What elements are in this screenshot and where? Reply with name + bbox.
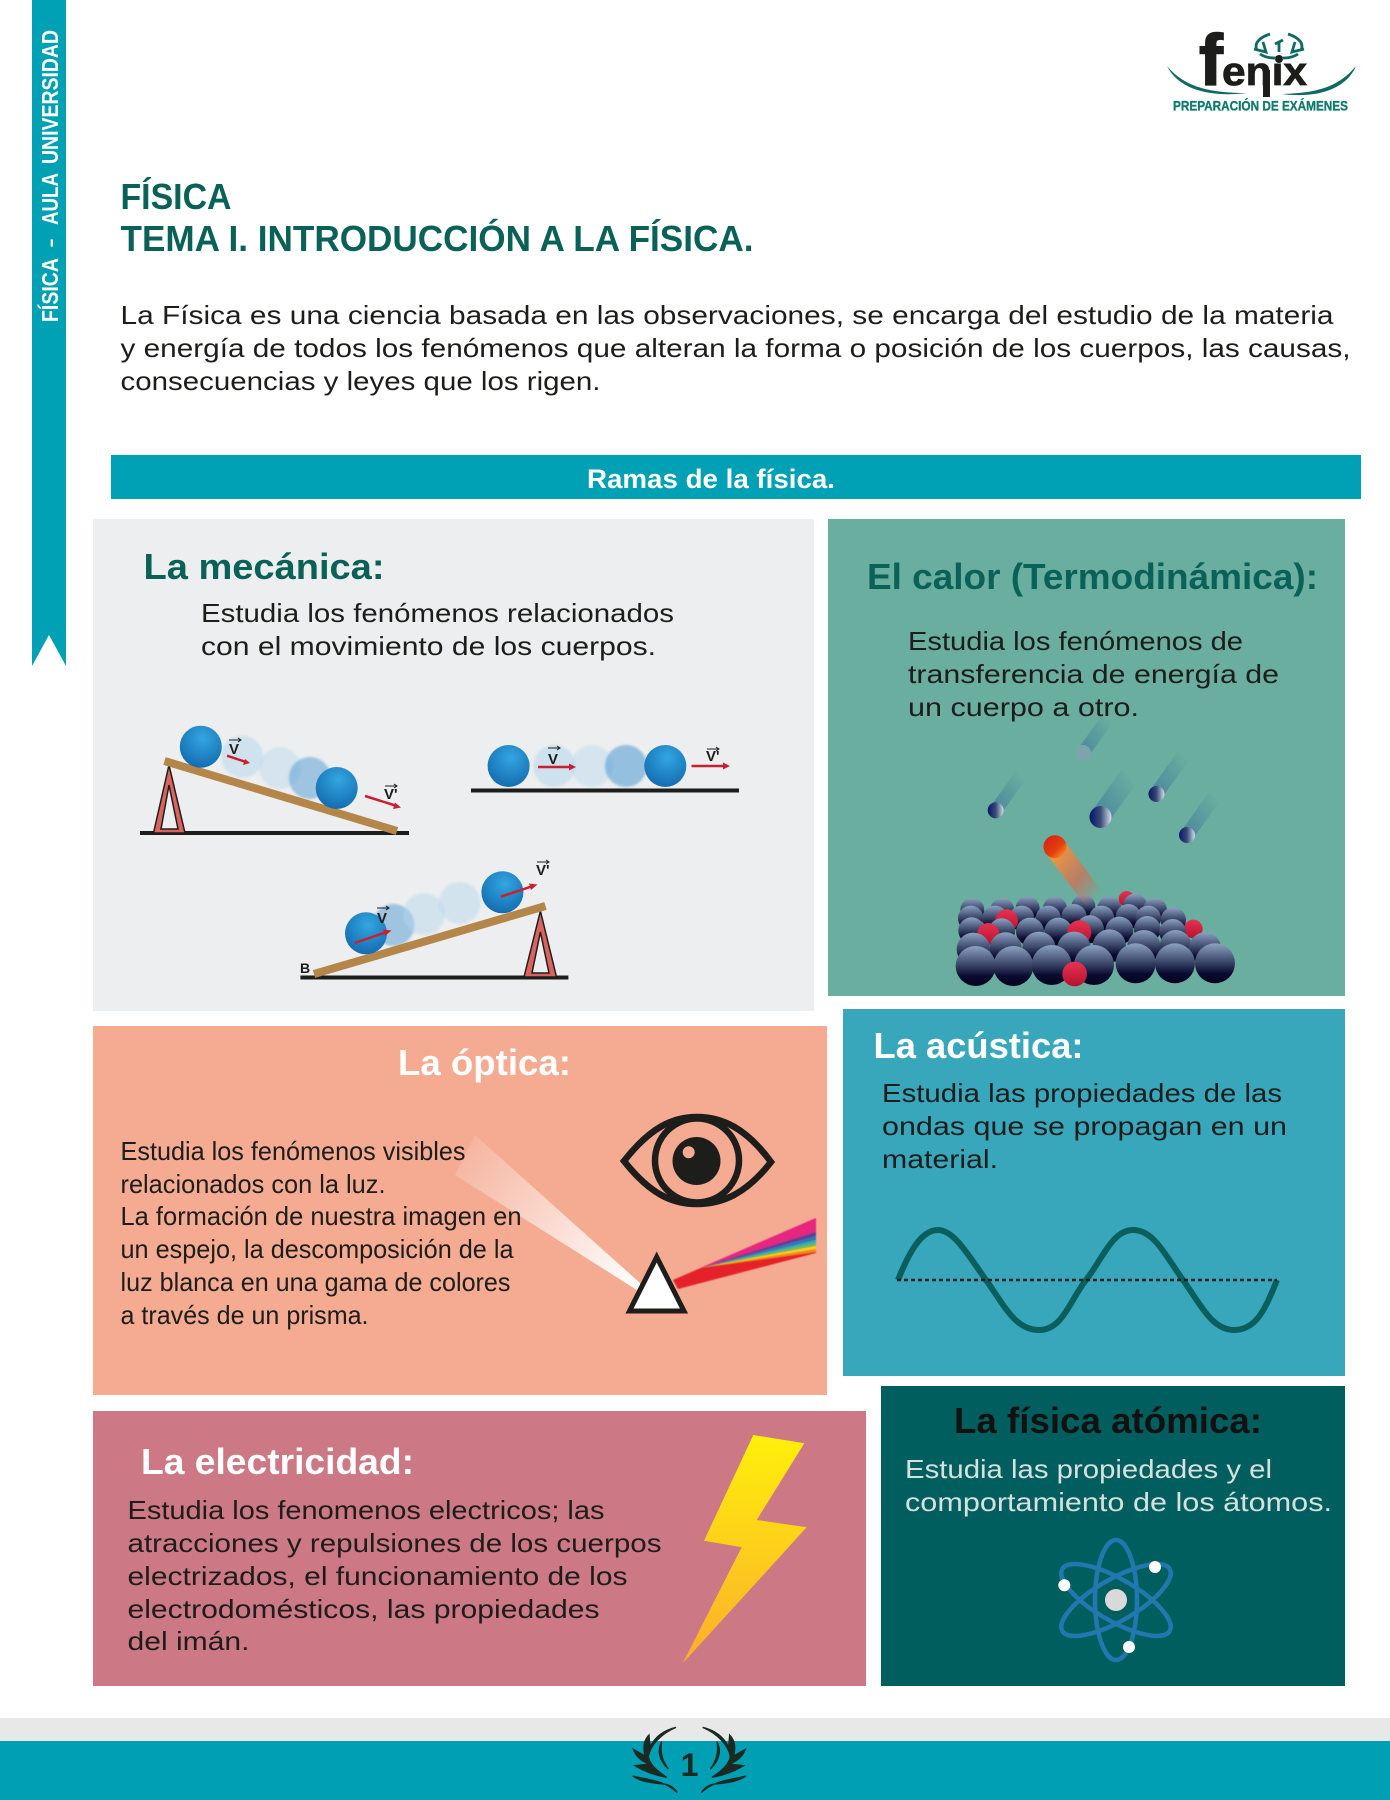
illustration: hot particle [1044,835,1095,900]
diagram: ball rolling down ramp: V [229,741,239,758]
text: electricidad description: Estudia los fenomenos electricos; las [128,1495,604,1525]
text: óptica description: un espejo, la descomposición de la [120,1234,514,1264]
side ribbon [32,0,66,666]
heading: la óptica: La óptica: [398,1042,571,1083]
icon: prism [630,1257,684,1311]
text: electricidad description: electrodomésticos, las propiedades [128,1594,600,1624]
text: óptica description: La formación de nuestra imagen en [120,1201,522,1231]
panel: la física atómica [881,1386,1345,1686]
text: mecánica description: con el movimiento de los cuerpos. [201,631,656,661]
chart: sound wave [897,1230,1277,1330]
text: óptica description [120,1136,522,1330]
text: electricidad description: del imán. [128,1626,250,1656]
intro paragraph: consecuencias y leyes que los rigen. [120,366,600,396]
heading: la acústica: La acústica: [874,1025,1084,1066]
intro paragraph: y energía de todos los fenómenos que alteran la forma o posición de los cuerpos, las causas, [120,333,1350,363]
text: óptica description: a través de un prisma. [120,1300,368,1330]
diagram: ball rolling up ramp [300,860,568,980]
heading: la mecánica: La mecánica: [144,546,384,587]
text: calor description: transferencia de energía de [908,659,1279,689]
title [120,176,754,259]
ribbon label: AULA [37,173,63,225]
panel: el calor [828,519,1345,996]
text: atómica description [905,1454,1332,1517]
diagram: ball rolling on flat surface [471,745,739,792]
text: óptica description: relacionados con la luz. [120,1169,386,1199]
diagram: ball rolling down ramp [140,726,409,835]
illustration: atoms lattice [956,891,1235,986]
text: óptica description: luz blanca en una gama de colores [120,1267,510,1297]
text: electricidad description: atracciones y repulsiones de los cuerpos [128,1528,662,1558]
text: acústica description: material. [882,1144,998,1174]
icon: lightning bolt [683,1435,807,1663]
heading: la física atómica: La física atómica: [954,1400,1262,1441]
text: electricidad description: electrizados, el funcionamiento de los [128,1561,628,1591]
text: atómica description: Estudia las propiedades y el [905,1454,1272,1484]
spectrum rays [673,1218,816,1289]
text: acústica description: ondas que se propagan en un [882,1111,1287,1141]
ribbon label: UNIVERSIDAD [37,30,63,164]
text: acústica description: Estudia las propiedades de las [882,1078,1282,1108]
section bar: Ramas de la física: Ramas de la física. [587,464,835,494]
heading: la electricidad: La electricidad: [141,1441,414,1482]
diagram: ball rolling down ramp: V' [384,786,398,803]
text: electricidad description [128,1495,662,1656]
intro paragraph [120,300,1350,396]
text: óptica description: Estudia los fenómenos visibles [120,1136,466,1166]
diagram: ball rolling on flat surface: V [548,751,558,768]
text: calor description: un cuerpo a otro. [908,692,1139,722]
heading: el calor: El calor (Termodinámica): [867,556,1318,597]
illustration: falling particles [988,718,1215,843]
section bar: Ramas de la física [111,455,1361,499]
panel: la mecánica [93,519,814,1011]
diagram: ball rolling up ramp: V' [536,862,550,879]
footer page number with laurel [633,1727,746,1793]
logo: fenix: enıx [1222,50,1307,94]
intro paragraph: La Física es una ciencia basada en las observaciones, se encarga del estudio de la materia [120,300,1334,330]
ribbon label: – [37,239,63,247]
diagram: ball rolling on flat surface: V' [706,748,720,765]
text: mecánica description: Estudia los fenómenos relacionados [201,598,674,628]
text: acústica description [882,1078,1287,1174]
light beam [455,1135,640,1292]
icon: eye [624,1117,771,1204]
panel: la acústica [843,1009,1345,1376]
panel: la electricidad [93,1411,866,1686]
logo: fenix [1167,21,1356,114]
title: FÍSICA [120,176,232,217]
logo tagline: PREPARACIÓN DE EXÁMENES [1173,98,1348,114]
logo: fenix: f [1199,21,1224,101]
diagram: ball rolling up ramp: V [377,910,387,927]
title: TEMA I. INTRODUCCIÓN A LA FÍSICA. [120,217,754,259]
text: calor description [908,626,1279,722]
footer page number with laurel: 1 [681,1747,698,1783]
text: calor description: Estudia los fenómenos de [908,626,1243,656]
icon: atom [1052,1540,1180,1660]
text: atómica description: comportamiento de los átomos. [905,1487,1332,1517]
diagram: ball rolling up ramp: B [300,960,310,976]
ribbon label: FÍSICA [36,258,63,322]
footer band [0,1718,1390,1800]
ribbon label [36,30,63,322]
text: mecánica description [201,598,674,661]
panel: la óptica [93,1026,827,1395]
